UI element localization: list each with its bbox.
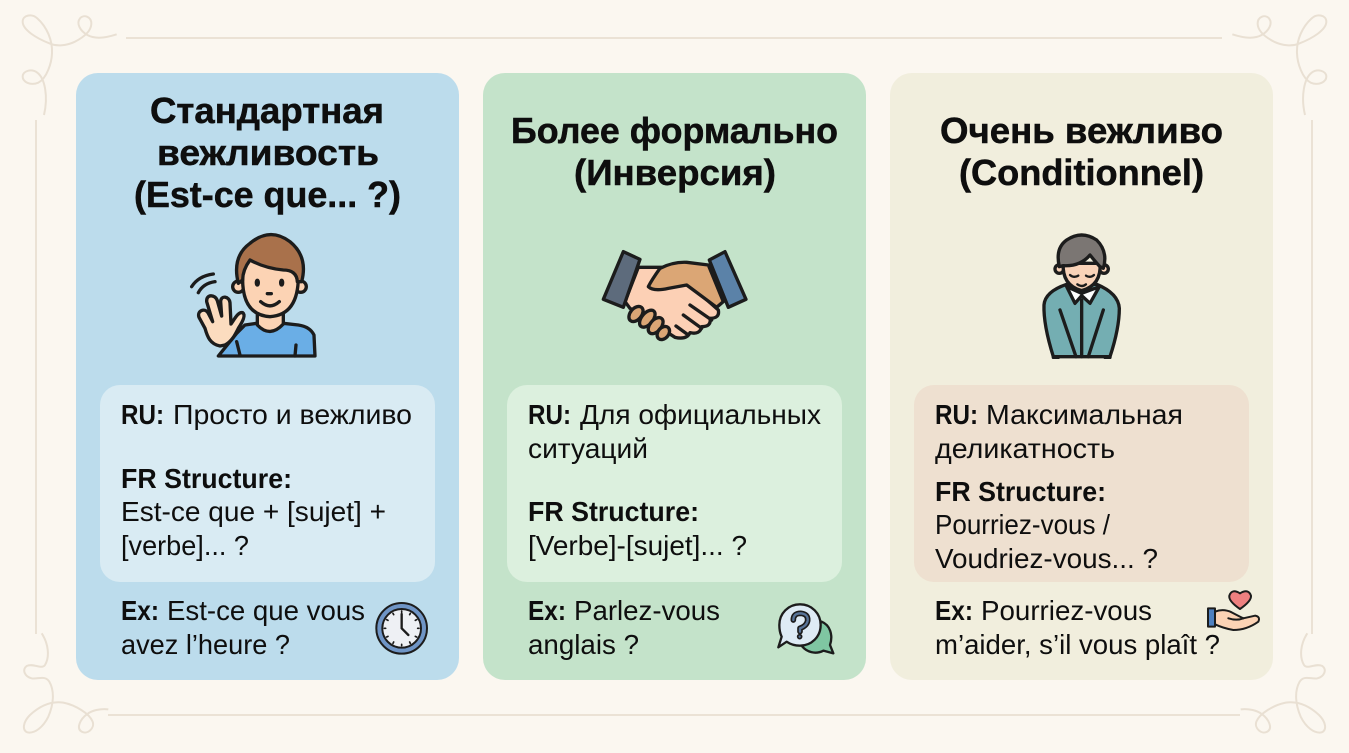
french structure: FR Structure:: [121, 463, 292, 494]
card background: [483, 73, 866, 680]
example: Ex:: [935, 595, 973, 626]
heading: (Conditionnel): [959, 152, 1204, 193]
example: anglais ?: [528, 629, 639, 660]
russian description: RU:: [528, 399, 571, 430]
russian description: Максимальная: [986, 399, 1183, 430]
russian description: Просто и вежливо: [173, 399, 412, 430]
icon: clock: [376, 603, 427, 654]
heading: [511, 110, 838, 193]
card background: [76, 73, 459, 680]
heading: (Инверсия): [574, 152, 776, 193]
panel: very polite: [890, 73, 1273, 680]
heading: вежливость: [157, 132, 379, 173]
russian description: Для официальных: [580, 399, 821, 430]
russian description: RU:: [121, 399, 164, 430]
example: m’aider, s’il vous plaît ?: [935, 629, 1220, 660]
russian description: ситуаций: [528, 433, 648, 464]
example: Pourriez-vous: [981, 595, 1152, 626]
heading: [940, 110, 1223, 193]
french structure: [Verbe]-[sujet]... ?: [528, 530, 747, 561]
example: avez l’heure ?: [121, 629, 290, 660]
panel: more formal: [483, 73, 866, 680]
french structure: [935, 476, 1158, 574]
example: Est-ce que vous: [167, 595, 365, 626]
example: [528, 595, 720, 660]
example: Ex:: [121, 595, 159, 626]
heading: Стандартная: [150, 90, 384, 131]
french structure: [528, 496, 747, 561]
example: [935, 595, 1220, 660]
icon: bowing person: [1044, 235, 1119, 357]
french structure: Voudriez-vous... ?: [935, 543, 1158, 574]
heading: [134, 90, 401, 215]
icon: waving person: [192, 235, 315, 356]
icon: question speech bubbles: [778, 604, 833, 653]
french structure: FR Structure:: [528, 496, 699, 527]
heading: Более формально: [511, 110, 838, 151]
russian description: RU:: [935, 399, 978, 430]
russian description: [528, 399, 821, 464]
french structure: [121, 463, 386, 561]
info box: [507, 385, 842, 582]
example: [121, 595, 365, 660]
card background: [890, 73, 1273, 680]
french structure: Pourriez-vous /: [935, 509, 1110, 540]
french structure: Est-ce que + [sujet] +: [121, 496, 386, 527]
heading: (Est-ce que... ?): [134, 174, 401, 215]
french structure: FR Structure:: [935, 476, 1106, 507]
example: Parlez-vous: [574, 595, 720, 626]
french structure: [verbe]... ?: [121, 530, 249, 561]
heading: Очень вежливо: [940, 110, 1223, 151]
russian description: [935, 399, 1183, 464]
russian description: деликатность: [935, 433, 1115, 464]
icon: handshake: [603, 252, 746, 342]
info box: [914, 385, 1249, 582]
example: Ex:: [528, 595, 566, 626]
info box: [100, 385, 435, 582]
panel: standard politeness: [76, 73, 459, 680]
icon: hand with heart: [1208, 591, 1259, 630]
